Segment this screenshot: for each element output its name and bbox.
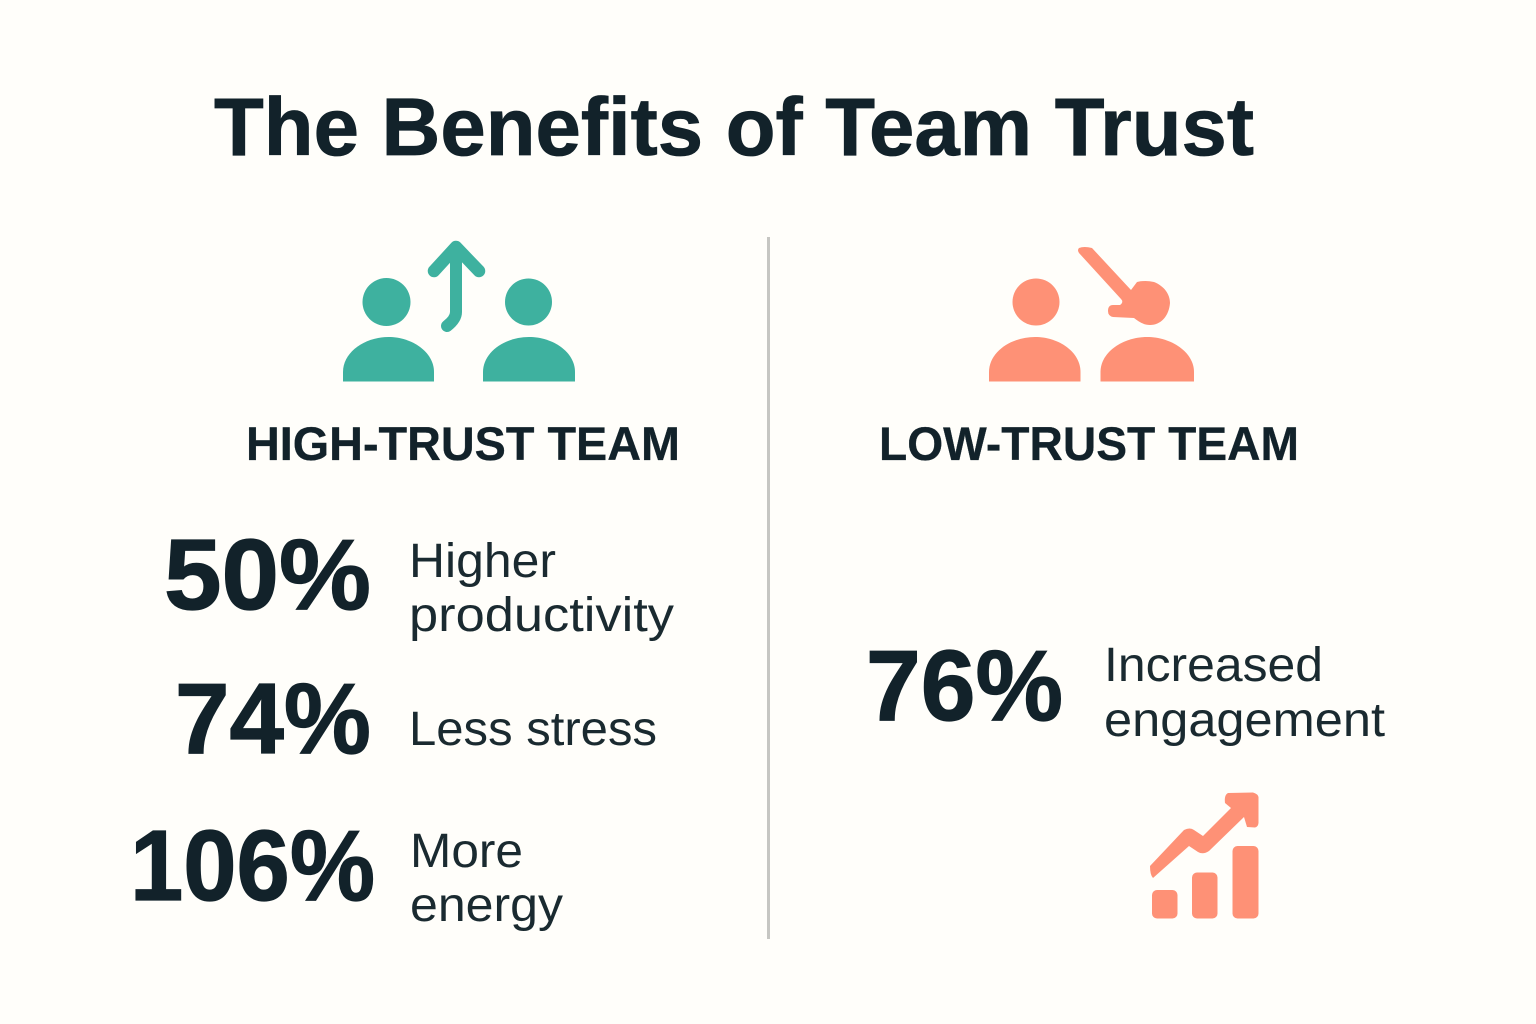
stat: 50% higher productivity: productivity: [409, 589, 674, 642]
stat: 50% higher productivity: 50%: [164, 519, 371, 631]
panel: high-trust team: [130, 247, 680, 932]
title: The Benefits of Team Trust: [214, 82, 1254, 173]
stat: 74% less stress: 74%: [175, 663, 371, 775]
icon: rising bar chart with arrow: [1150, 792, 1258, 918]
stat: 74% less stress: [175, 663, 657, 775]
stat: 106% more energy: energy: [410, 879, 563, 932]
stat: 50% higher productivity: [164, 519, 674, 642]
heading: high-trust team: HIGH-TRUST TEAM: [246, 417, 680, 470]
stat: 106% more energy: [130, 810, 563, 932]
stat: 106% more energy: More: [410, 825, 523, 878]
stat: 76% increased engagement: engagement: [1104, 694, 1385, 747]
stat: 76% increased engagement: [866, 630, 1385, 747]
stat: 74% less stress: Less stress: [409, 703, 657, 756]
icon: two people with down arrow: [989, 247, 1194, 382]
stat: 76% increased engagement: Increased: [1104, 639, 1323, 692]
heading: low-trust team: LOW-TRUST TEAM: [879, 417, 1299, 470]
stat: 50% higher productivity: Higher: [409, 535, 556, 588]
icon: two people with up arrow: [343, 247, 575, 382]
panel: low-trust team: [866, 247, 1385, 918]
stat: 76% increased engagement: 76%: [866, 630, 1063, 742]
stat: 106% more energy: 106%: [130, 810, 375, 922]
